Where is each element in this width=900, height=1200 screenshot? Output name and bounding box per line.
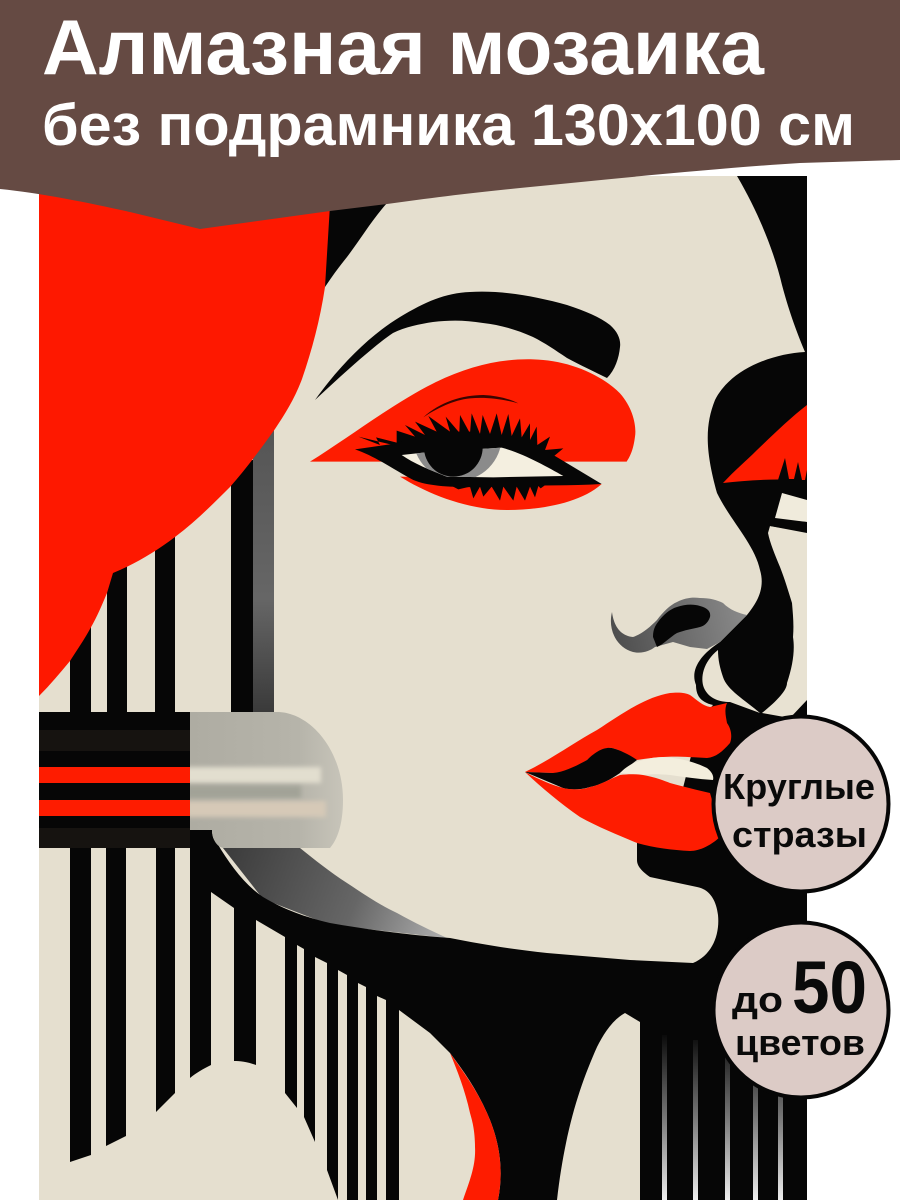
grey jaw shadow: [223, 848, 447, 938]
badge: up to 50 colours: до: [732, 979, 783, 1020]
badge: round rhinestones: [714, 716, 888, 892]
eye shadow upper: [310, 359, 635, 462]
right eye lashes: [778, 458, 807, 484]
makeup brush handle: [39, 712, 190, 848]
badge: round rhinestones: Круглые: [723, 766, 875, 807]
eyebrow: [315, 292, 620, 400]
upper lashes: [358, 413, 563, 457]
nostril: [653, 605, 710, 647]
badge: up to 50 colours: цветов: [735, 1022, 865, 1063]
lips: [525, 693, 731, 851]
nostril gap: [702, 650, 760, 713]
teeth: [620, 757, 713, 780]
upper vertical stripes: [70, 460, 253, 715]
eye crease: [423, 395, 518, 417]
badge: up to 50 colours: 50: [792, 946, 867, 1029]
title: Алмазная мозаика: [42, 3, 765, 91]
beige cheek window beside the nose: [762, 526, 807, 718]
lower left stripes: [70, 845, 175, 1162]
header banner: [0, 0, 900, 229]
black wedge by the forehead: [325, 200, 390, 287]
grey gradient stripe: [253, 429, 274, 712]
lower right faded stripes: [662, 1035, 783, 1200]
lower lip: [525, 772, 722, 851]
badge: round rhinestones: стразы: [732, 814, 867, 855]
lower lashes: [450, 484, 547, 501]
eye shadow lower: [400, 477, 602, 510]
poster background: [39, 176, 807, 1200]
right eye shadow: [723, 405, 807, 483]
nose shading: [611, 598, 747, 653]
black hair, neck and profile silhouette: [190, 176, 807, 1200]
left eye: [310, 359, 635, 510]
makeup brush bristles: [186, 712, 345, 848]
red shoulder crescent: [450, 1053, 501, 1200]
eye white: [402, 448, 563, 477]
mouth line: [525, 748, 637, 789]
pupil: [424, 432, 483, 477]
right eye lash line: [770, 519, 807, 532]
upper lip: [525, 693, 731, 774]
poster artwork: [39, 176, 807, 1200]
badge: up to 50 colours: [714, 922, 888, 1098]
subtitle: без подрамника 130х100 см: [42, 93, 855, 158]
right eye white: [775, 493, 807, 522]
handle red bands: [39, 767, 190, 783]
red hair shape: [39, 185, 330, 696]
eyelid outline: [355, 432, 602, 487]
iris: [416, 448, 500, 478]
